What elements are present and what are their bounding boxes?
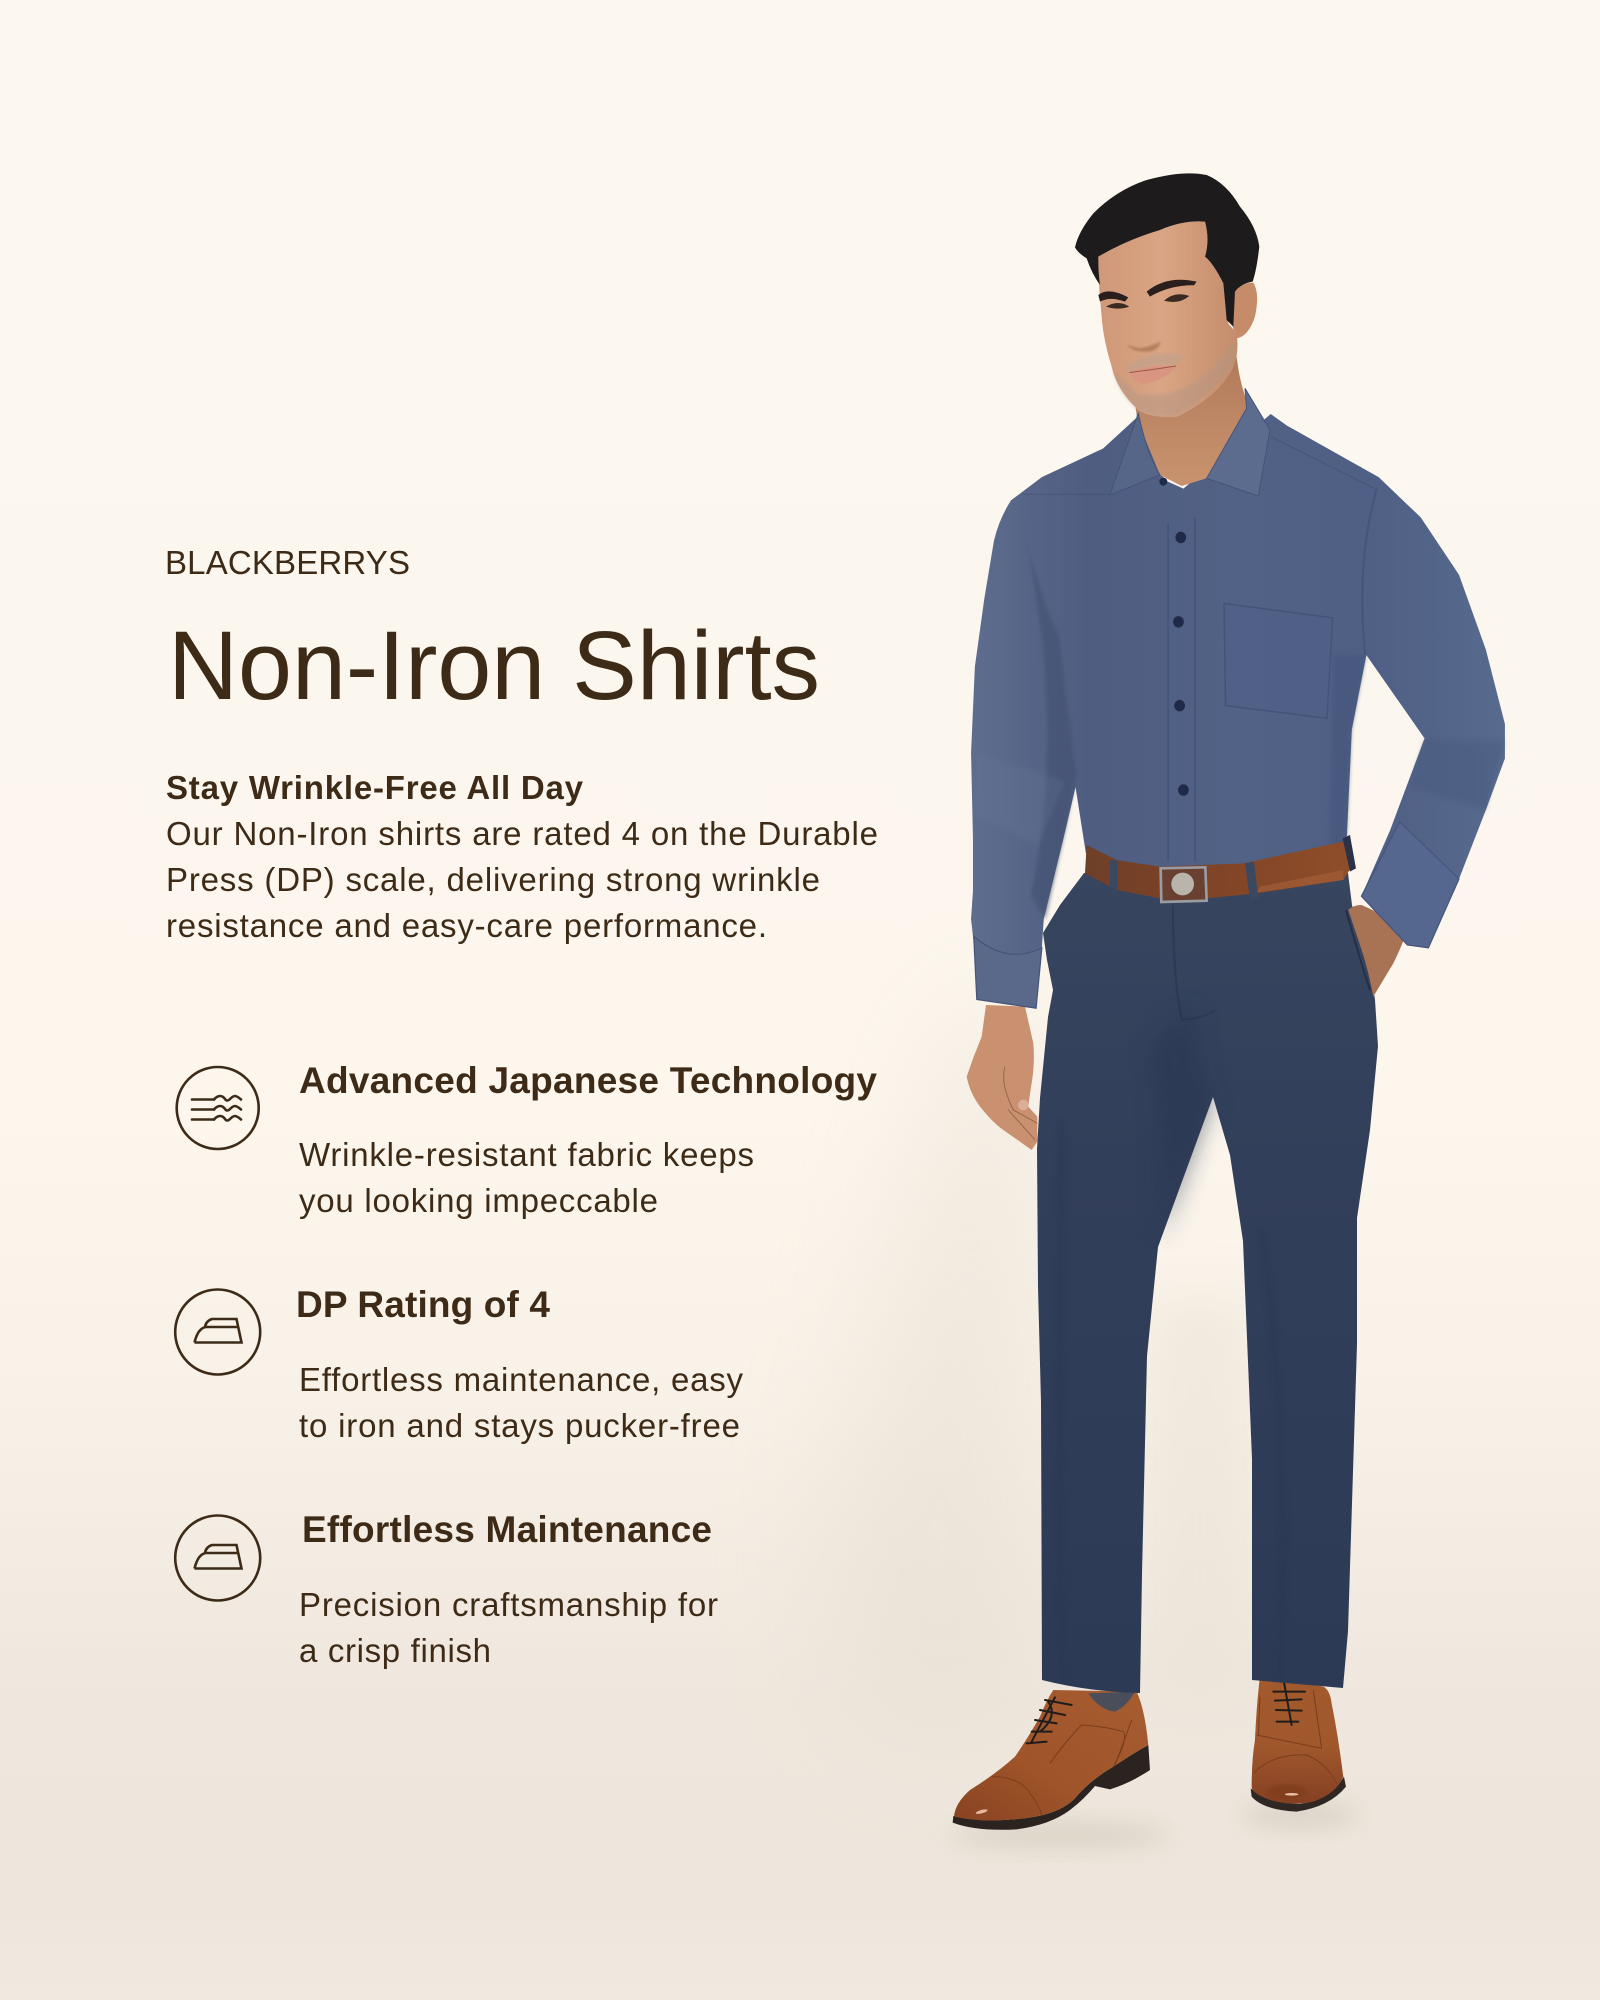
fingers — [1004, 1067, 1037, 1140]
nose — [1127, 342, 1161, 352]
feature: DP Rating of 4 — [175, 1284, 743, 1444]
neck — [1135, 357, 1250, 486]
left shoe seams — [992, 1720, 1132, 1815]
belt highlight — [1257, 870, 1343, 893]
feature heading: DP Rating of 4 — [296, 1284, 550, 1325]
trousers — [1037, 873, 1378, 1693]
buttons — [1173, 532, 1189, 796]
soft shadows behind model — [820, 1000, 1360, 1849]
collar right — [1207, 388, 1270, 496]
right eyebrow — [1147, 280, 1197, 297]
feature: Advanced Japanese Technology — [177, 1060, 877, 1219]
stubble — [1113, 340, 1237, 417]
intro heading: Stay Wrinkle-Free All Day — [166, 769, 584, 806]
feature heading: Effortless Maintenance — [302, 1509, 712, 1550]
shoes — [953, 1677, 1346, 1830]
feature description: Precision craftsmanship for — [299, 1586, 718, 1623]
right pocket edge — [1346, 910, 1370, 990]
feature description: Wrinkle-resistant fabric keeps — [299, 1136, 754, 1173]
title: Non-Iron Shirts — [168, 611, 820, 720]
left cuff — [974, 936, 1042, 1008]
right shoe seams — [1253, 1690, 1337, 1783]
brand name: BLACKBERRYS — [165, 544, 410, 581]
right eye — [1164, 294, 1189, 302]
intro text block — [166, 769, 878, 944]
right shoe laces — [1272, 1678, 1305, 1725]
sleeve shading left — [1021, 517, 1076, 919]
left hand — [967, 1005, 1037, 1150]
elbow folds — [1409, 738, 1505, 810]
right shoe sole — [1251, 1777, 1346, 1812]
lips — [1129, 366, 1176, 384]
feature description line 2: to iron and stays pucker-free — [299, 1407, 740, 1444]
right shoe upper — [1252, 1677, 1343, 1804]
left eye — [1106, 303, 1129, 309]
lip line — [1129, 366, 1176, 373]
ear — [1232, 283, 1257, 338]
moustache — [1125, 354, 1183, 373]
leg creases — [1060, 1120, 1283, 1680]
left shoe toe shine — [975, 1808, 988, 1815]
face — [1098, 221, 1237, 417]
feature: Effortless Maintenance — [175, 1509, 718, 1669]
collar left — [1110, 413, 1160, 495]
belt loops — [1110, 860, 1258, 900]
feature description: Effortless maintenance, easy — [299, 1361, 744, 1398]
right cuff — [1361, 822, 1459, 948]
intro line 2: Press (DP) scale, delivering strong wrinkle — [166, 861, 820, 898]
left shoe sock — [1088, 1692, 1135, 1712]
right shoe toe shading — [1267, 1784, 1307, 1799]
left shoe upper — [954, 1690, 1148, 1820]
collar button — [1159, 478, 1167, 486]
shirt body and sleeves — [971, 414, 1505, 1008]
model illustration — [953, 173, 1505, 1830]
left shoe laces — [1027, 1697, 1072, 1743]
thumbnail — [1018, 1100, 1029, 1110]
shirt and upper body — [971, 414, 1505, 1008]
yoke seam — [1023, 437, 1375, 494]
feature heading: Advanced Japanese Technology — [299, 1060, 877, 1101]
left sleeve highlight — [975, 753, 1065, 845]
feature description line 2: you looking impeccable — [299, 1182, 658, 1219]
icon: iron — [175, 1290, 260, 1374]
hair — [1075, 173, 1259, 327]
sleeve seam right — [1362, 489, 1377, 655]
icon: iron — [175, 1516, 260, 1600]
intro line 1: Our Non-Iron shirts are rated 4 on the Durable — [166, 815, 878, 852]
belt buckle — [1161, 867, 1207, 902]
left eyebrow — [1098, 291, 1128, 302]
head and collar — [1075, 173, 1270, 496]
intro line 3: resistance and easy-care performance. — [166, 907, 767, 944]
belt keeper — [1343, 835, 1356, 872]
placket — [1168, 517, 1195, 862]
left shoe sole — [953, 1745, 1150, 1830]
right shoe shine — [1285, 1793, 1298, 1796]
right hand in pocket — [1348, 905, 1408, 997]
fly — [1173, 905, 1215, 1020]
buckle disc — [1171, 873, 1194, 895]
icon: fabric waves — [177, 1067, 259, 1149]
crotch folds — [1150, 1000, 1213, 1240]
pocket — [1224, 603, 1333, 718]
feature description line 2: a crisp finish — [299, 1632, 491, 1669]
torso side shading right — [1329, 655, 1366, 853]
belt — [1085, 835, 1356, 902]
